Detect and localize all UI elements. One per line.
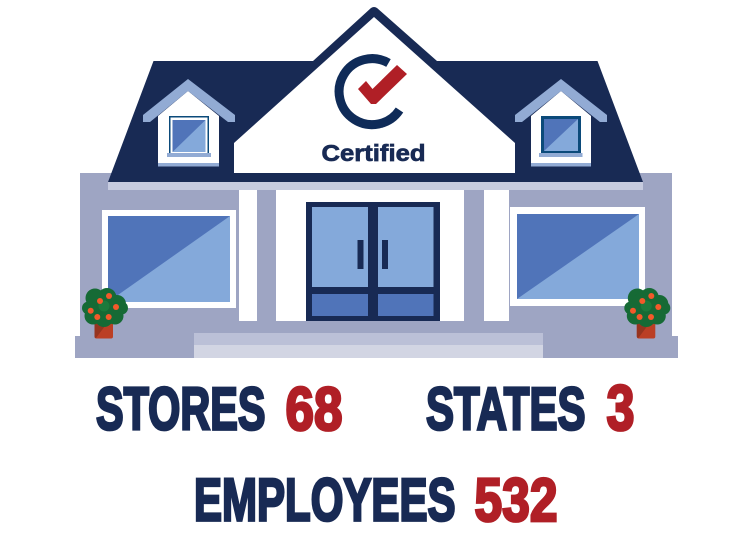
logo check (358, 65, 407, 104)
gable sign panel (234, 17, 515, 173)
employees value: 532 (474, 466, 558, 534)
employees label: EMPLOYEES (194, 466, 456, 534)
dormer glass dark (544, 119, 578, 151)
window glass light (517, 214, 639, 299)
right shop window (510, 207, 645, 306)
dormer roof (515, 79, 607, 122)
window glass dark (108, 216, 230, 302)
window frame (510, 207, 645, 306)
logo ring (339, 59, 400, 125)
dormer window frame (541, 116, 581, 155)
dormer glass dark (172, 120, 206, 152)
left flower pot plant (82, 288, 128, 338)
dormer window frame (169, 116, 209, 156)
right dormer (515, 79, 607, 166)
dormer glass light (544, 119, 578, 151)
left handle (358, 240, 364, 269)
oranges (88, 293, 119, 320)
right door kick panel (378, 294, 434, 316)
entrance step upper (194, 333, 543, 345)
states value: 3 (606, 372, 634, 444)
window frame (102, 210, 236, 308)
dormer body (158, 91, 219, 166)
sign text: Certified (322, 140, 426, 166)
dormer glass light (172, 120, 206, 152)
oranges (630, 293, 661, 320)
left door kick panel (312, 294, 368, 316)
cornice (108, 182, 643, 190)
stat: employees (194, 466, 558, 534)
dormer window mat (170, 118, 208, 154)
dormer sill (539, 153, 582, 157)
right column (484, 190, 509, 321)
wall (80, 173, 672, 338)
stores label: STORES (96, 376, 266, 442)
left column (239, 190, 257, 321)
stores value: 68 (286, 375, 342, 443)
base plinth (75, 336, 678, 358)
dormer sill (167, 153, 211, 157)
leaf highlight (641, 300, 652, 312)
double door (306, 202, 440, 321)
window glass dark (517, 214, 639, 299)
leaf highlight (98, 300, 110, 312)
left door glass (312, 207, 368, 287)
pot (637, 320, 655, 338)
left shop window (102, 210, 236, 308)
dormer base strip (531, 163, 591, 166)
right flower pot plant (624, 288, 670, 338)
foliage (82, 288, 128, 327)
dormer base strip (158, 163, 219, 166)
right handle (382, 240, 388, 269)
window glass light (108, 216, 230, 302)
foliage (624, 288, 670, 327)
right door glass (378, 207, 434, 287)
pot shadow (637, 322, 650, 338)
dormer body (531, 91, 591, 166)
stat: states (426, 372, 634, 444)
logo: certified check mark (339, 59, 407, 125)
dormer roof (143, 79, 235, 122)
pot shadow (94, 322, 108, 338)
pot (94, 320, 113, 338)
roof (108, 7, 643, 182)
door frame (306, 202, 440, 321)
center entrance wall (276, 190, 464, 321)
stat: stores (96, 375, 342, 443)
illustration: store building (75, 7, 678, 358)
left dormer (143, 79, 235, 166)
states label: STATES (426, 376, 586, 442)
entrance step lower (194, 345, 543, 358)
